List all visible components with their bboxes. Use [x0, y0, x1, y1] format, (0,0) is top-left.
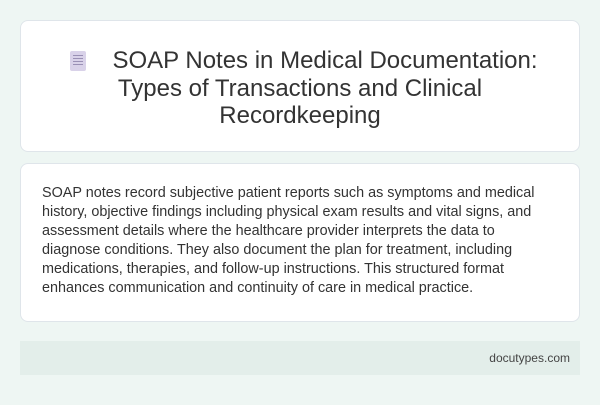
title: [112, 47, 538, 129]
footer text: docutypes.com: [489, 351, 570, 365]
footer: [20, 341, 580, 375]
panel: header: [20, 20, 580, 152]
title: Recordkeeping: [219, 102, 381, 129]
icon: document: [70, 51, 86, 71]
title: Types of Transactions and Clinical: [118, 74, 482, 102]
panel: description: [20, 163, 580, 322]
text block: SOAP notes record subjective patient reports such as symptoms and medical history, objective findings including physical exam results and vital signs, and assessment details where the healthcare provider interprets the data to diagnose conditions. They also document the plan for treatment, including medications, therapies, and follow-up instructions. This structured format enhances communication and continuity of care in medical practice.: [42, 185, 534, 296]
title: SOAP Notes in Medical Documentation:: [112, 47, 538, 74]
